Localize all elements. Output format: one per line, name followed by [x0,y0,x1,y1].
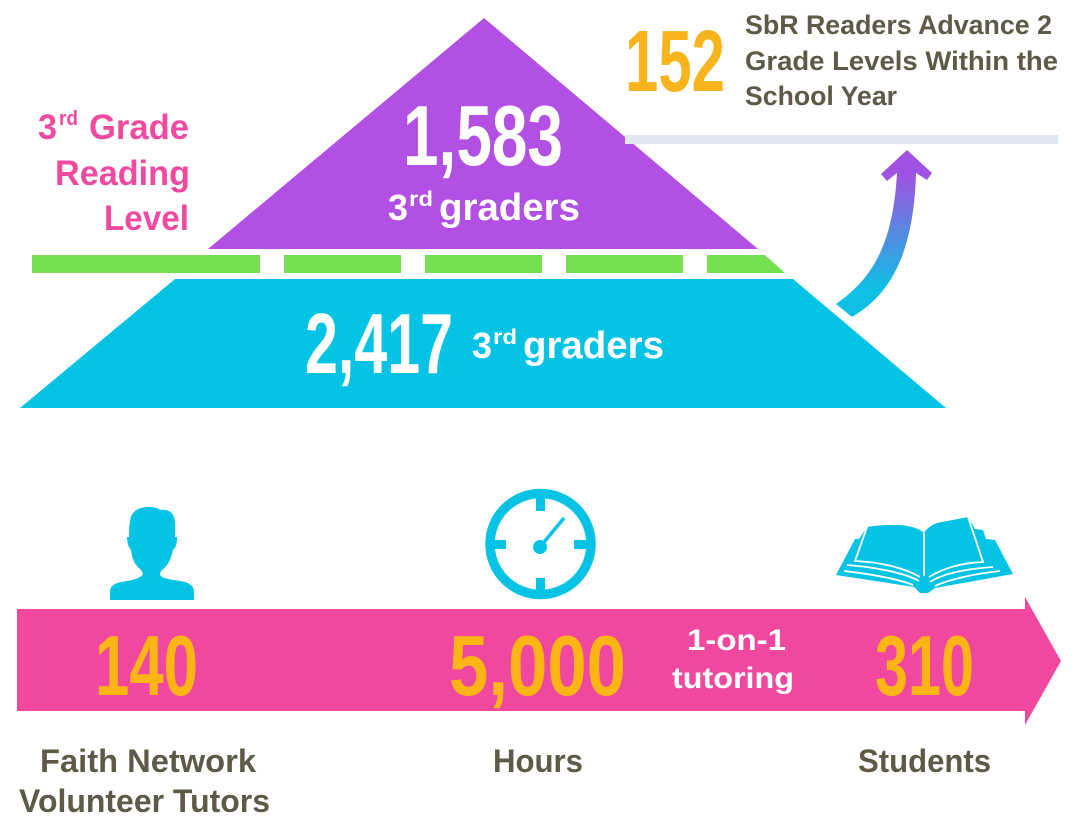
label: Faith Network Volunteer Tutors: Volunteer Tutors [19,783,270,819]
number: 1,583: 1,583 [403,89,563,184]
pink banner arrow [17,597,1061,725]
label: Faith Network Volunteer Tutors [19,743,270,819]
callout text: Grade Levels Within the [745,46,1058,76]
heading: 3rd Grade Reading Level: Reading [55,154,190,193]
text: 1-on-1 tutoring [672,624,794,695]
text: 1-on-1 tutoring: tutoring [672,662,794,695]
teal pyramid base: below grade level [20,279,946,408]
icon: person [110,507,194,600]
heading: 3rd Grade Reading Level: Level [104,199,189,238]
number: 152: 152 [625,13,725,110]
icon: clock [488,491,593,598]
label: 3rd graders (teal): graders [523,325,664,367]
icon: open book [836,517,1013,593]
label: 3rd graders (teal): 3 [472,325,492,366]
green dashed grade-level line [32,255,785,273]
light grey-blue target line [625,135,1058,144]
label: Students: Students [858,743,991,779]
label: 3rd graders (purple): rd [409,188,433,211]
heading: 3rd Grade Reading Level: rd [59,108,78,130]
number: 140: 140 [95,619,198,714]
purple pyramid top: reading at grade level [208,18,758,249]
label: Faith Network Volunteer Tutors: Faith Network [40,743,256,779]
label: 3rd graders (purple): 3 [388,187,408,228]
heading: 3rd Grade Reading Level: 3 [38,108,57,147]
callout text [745,10,1058,111]
label: 3rd graders (purple): graders [439,187,580,229]
text: 1-on-1 tutoring: 1-on-1 [687,624,786,657]
number: 2,417: 2,417 [305,297,453,392]
callout text: School Year [745,81,897,111]
number: 310: 310 [875,619,974,714]
curved arrow rising to target line [836,150,932,317]
number: 5,000: 5,000 [449,619,626,714]
callout: 152 readers advance [625,10,1058,111]
label: 3rd graders (teal): rd [493,326,517,349]
label: Hours: Hours [493,743,583,779]
heading: 3rd Grade Reading Level: Grade [89,108,189,147]
callout text: SbR Readers Advance 2 [745,10,1052,40]
heading: 3rd Grade Reading Level [38,108,190,238]
